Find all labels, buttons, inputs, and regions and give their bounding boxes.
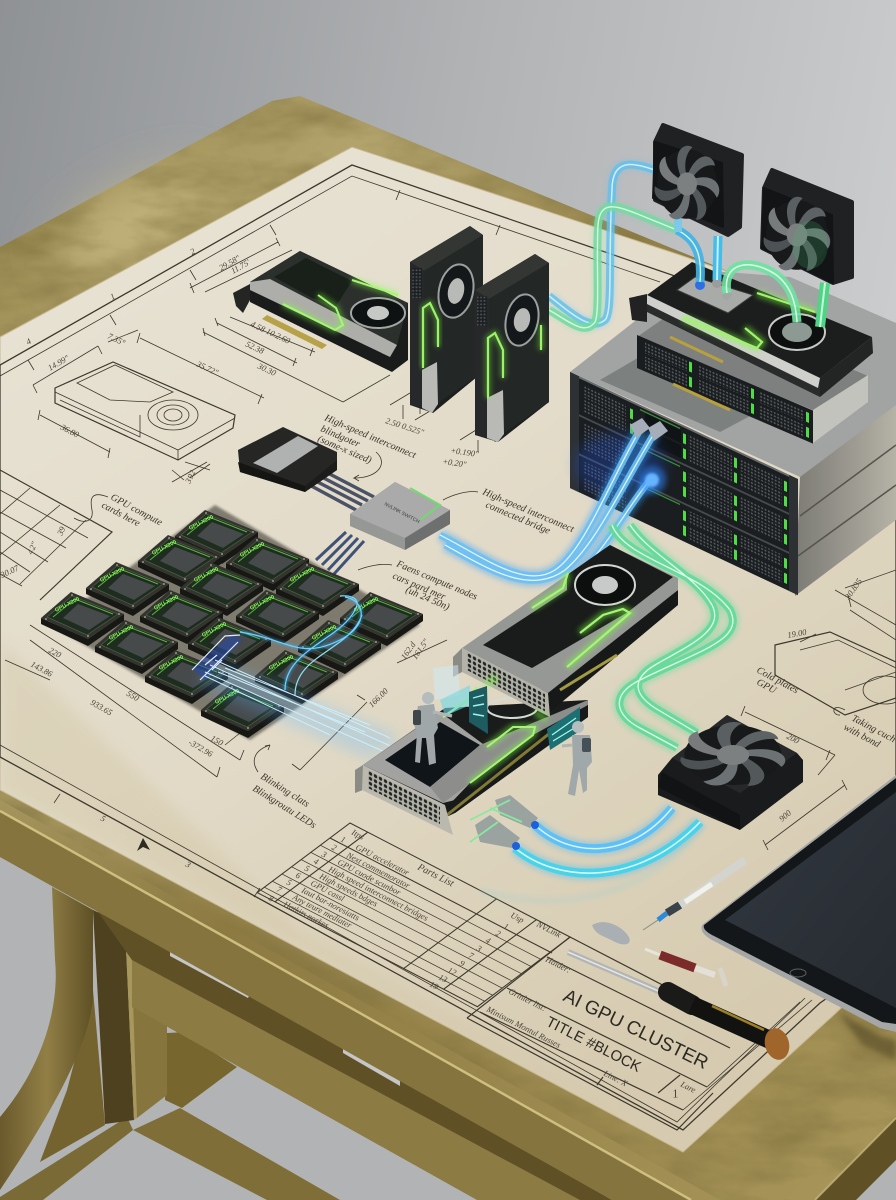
gold edge connectors [670,337,730,410]
table: parts list: Next commemorator [344,849,412,891]
title block: TITLE #BLOCK [543,1013,644,1076]
annotation: blinking LEDs: Blinkgroutu LEDs [250,783,318,831]
dimension lines: top GPU: 30.30 [255,360,278,378]
compute card: GPU-X200 [311,624,338,642]
table post: side face [133,1000,167,1118]
blueprint line drawing: right side parts [741,570,896,850]
compute card [276,562,359,616]
table: parts list: Itps [349,826,367,842]
compute card: GPU-X200 [188,514,215,532]
annotation: compute nodes: Faens compute nodes [394,558,479,603]
GPU: top-left horizontal [233,251,408,372]
annotation: cold plates: with bond [842,722,883,751]
table strut: rear [165,1032,237,1108]
table: parts list [257,823,572,1008]
dimension lines: top GPU: 29.58" [217,253,242,273]
table: parts list: 3 [319,848,328,860]
interconnect bridge 2: NVLINK SWITCH [383,501,421,525]
blueprint line drawing: right side parts: 30.835 [842,576,864,602]
dimension lines: chip grid: 150 [209,733,226,748]
compute card [188,617,271,671]
annotation: cold plates: Cold plates [755,665,800,696]
fittings: lower connectors [470,795,539,850]
vertical GPU 2 [475,254,549,442]
dimension lines: chip grid: 162.d [398,639,418,661]
compute card: GPU-X200 [153,594,180,612]
blueprint line drawing: right side parts: 900 [777,807,794,824]
compute card: GPU-X200 [249,594,276,612]
compute card [140,590,223,644]
compute card: GPU-X200 [289,566,316,584]
table: parts list: 8 [267,893,276,904]
table: parts list: 7 [275,884,284,895]
annotation: GPU compute cards: GPU compute [109,492,165,529]
table: parts list: 7 [467,950,476,961]
interconnect bridge 1 [238,427,374,510]
table: parts list: 4 [484,935,493,946]
liquid tubes: top assembly [549,165,825,328]
annotation: GPU compute cards [74,492,165,530]
table apron [132,960,580,1200]
compute card: GPU-X200 [54,596,81,614]
blueprint line drawing: GPU outline: 36.80 [58,421,81,440]
title block: AI GPU CLUSTER [560,986,711,1074]
table leg face behind curve [40,990,105,1162]
syringe [643,860,745,930]
fan radiator 2 [760,170,852,283]
dimension lines: chip grid: 143.86 [29,659,55,679]
server chassis side [795,405,896,596]
table: parts list: 6 [294,870,303,881]
compute card: GPU-X200 [201,621,228,639]
annotation: high-speed interconnect bridge 2 [443,486,576,537]
water-cooled GPU on server [629,262,873,397]
compute card [340,592,423,646]
liquid tubes: lower connectors [480,808,700,901]
GPU: lower with figures [355,698,588,835]
blueprint paper sheet: 1 [108,291,117,302]
table: parts list: 9 [458,958,467,969]
annotation: high-speed interconnect bridges: blindgoter [319,424,362,450]
dimension lines: chip grid: 933.65 [89,697,114,717]
annotation: cold plates: GPU [755,677,779,697]
tablet [701,775,896,1060]
vertical GPU 1 [410,226,483,413]
table: parts list: 4 [312,856,321,867]
compute card: GPU-X200 [214,688,241,706]
table: parts list: Parts List [415,861,456,890]
title block: Line: X [601,1067,630,1089]
dimension lines: top GPU: 11.75' [229,257,252,276]
table back fill under top [93,905,612,1200]
table: parts list: 5 [303,863,311,874]
figure: technician with hologram [413,665,488,765]
floor backdrop under table [0,780,896,1200]
annotation: high-speed interconnect bridge 2: High-speed interconnect [480,486,576,535]
dimension lines: top GPU: 4.58 10.2.60 [249,319,293,346]
dimension lines: top GPU [190,238,500,469]
compute card [175,510,258,564]
compute card: GPU-X200 [108,624,135,642]
table strut: lower left [0,1117,133,1200]
title block: 1 [671,1086,679,1101]
annotation: high-speed interconnect bridges [316,412,418,481]
dimension lines: top GPU: 52.38 [244,339,266,356]
annotation: blinking LEDs [250,745,318,831]
dimension lines: top GPU: +0.190" [450,445,480,459]
blueprint line drawing: GPU outline: 14.99" [46,353,71,373]
compute card: GPU-X200 [239,541,266,559]
dimension lines: chip grid: 550 [125,688,142,703]
compute card: GPU-X200 [193,566,220,584]
compute card: GPU-X200 [268,654,295,672]
table: parts list: NVLink [534,918,563,940]
screwdriver [568,952,793,1063]
annotation: high-speed interconnect bridges: (some-x sized) [316,434,374,466]
compute card [41,592,124,646]
fan radiator 1 [651,125,742,235]
dimension lines: chip grid: 166.00 [366,685,390,709]
annotation: compute nodes: cars pard mer [391,571,447,603]
dimension lines: chip grid [5,625,447,777]
compute card: GPU-X200 [158,654,185,672]
table: parts list: 1 [339,834,347,845]
blueprint grid: left table: 39 [54,524,68,538]
dimension lines: chip grid: 220 [47,645,64,660]
table: parts list: 3 [474,942,483,954]
annotation: high-speed interconnect bridge 2: connected bridge [484,500,552,537]
table: parts list: 2 [494,928,503,939]
annotation: GPU compute cards: cards here [100,500,142,530]
compute card: GPU-X200 [99,566,126,584]
data cables: green to lower radiator [612,525,733,748]
table: parts list: Any teure mediater [290,891,354,931]
table: parts list: 1 [502,921,510,932]
table: legs and rails [0,887,612,1200]
dimension lines: chip grid: 161.5" [409,636,431,661]
glowing data lines across chips [192,596,395,755]
blueprint grid: left table: 4 2" [25,540,39,556]
title block: Grinler list: [507,986,548,1013]
table post: dark face [93,910,134,1124]
interconnect bridge 2 [316,482,450,574]
blueprint line drawing: right side parts: 19.00 [787,627,808,640]
thermal paste tube [645,949,726,986]
server chassis top [570,270,896,477]
server front panels [570,372,798,595]
table: parts list: GPU cuode scunbor [336,857,403,898]
server stack [570,270,896,596]
blueprint grid: left table [0,470,112,600]
blueprint paper sheet: 5 [99,813,108,824]
table: parts list: 12 [446,965,459,978]
annotation: compute nodes: (uh 24 50n) [404,585,452,613]
figure: technician with tablet [547,707,592,796]
title block: Lare [678,1078,698,1095]
dimension lines: top GPU: +0.20" [442,456,467,469]
blueprint line drawing: GPU outline: 35.72" [194,358,220,378]
compute card [236,590,319,644]
table: parts list: 5 [285,877,293,888]
compute card [255,650,338,704]
table: parts list: Usp [509,910,526,925]
table: parts list: GPU accelerator [354,842,412,878]
dimension lines: top GPU: 2.50 0.525" [384,415,426,437]
table gap sliver [170,950,250,998]
compute card: GPU-X200 [151,539,178,557]
table: parts list: High speeds bdges [317,870,380,909]
title block: Minisum Montul Russes [484,1003,563,1050]
annotation: cold plates [755,665,896,751]
annotation: blinking LEDs: Blinking clats [258,771,311,810]
compute card [86,562,169,616]
title block [467,937,812,1130]
blueprint paper sheet: 4 [24,336,33,347]
compute card [180,562,263,616]
annotation: compute nodes [358,558,479,613]
compute card [201,684,284,738]
chip grid: GPU compute cards [41,505,423,740]
table: parts list: 19 [428,979,441,992]
annotation: cold plates: Taking cuch [850,713,896,745]
top small server [637,300,868,444]
table: parts list: 2 [330,842,339,853]
compute card [226,537,309,591]
table stretcher: lower right [133,1108,340,1200]
blueprint paper sheet: 3 [183,858,193,870]
data cables: blue to server [440,418,668,580]
compute card [138,535,221,589]
GPU: center large [453,545,678,720]
blueprint line drawing: right side parts: 200 [785,731,802,746]
blueprint paper sheet: 2 [188,246,197,257]
fan radiator on paper [658,715,803,830]
title block: Haider: [543,953,573,975]
table: parts list: 13 [437,972,449,985]
compute card: GPU-X200 [353,596,380,614]
thermal paste smear [592,922,630,944]
table: parts list: Iaut bar-noresiatts [299,884,362,923]
table: parts list: GPU cassl [309,878,347,904]
annotation: high-speed interconnect bridges: High-speed interconnect [322,412,418,461]
dimension lines: chip grid: -372.96 [187,737,215,759]
table: parts list: High speed interconnect bridges [326,863,431,923]
table leg: curved [0,887,93,1190]
blueprint line drawing: GPU outline [33,330,264,486]
compute card [95,620,178,674]
blueprint line drawing: GPU outline: 3 92 [182,468,198,486]
blueprint line drawing: GPU outline: 7.35° [106,331,127,348]
table: parts list: Hatkits norkes [281,898,331,930]
compute card [145,650,228,704]
compute card [298,620,381,674]
